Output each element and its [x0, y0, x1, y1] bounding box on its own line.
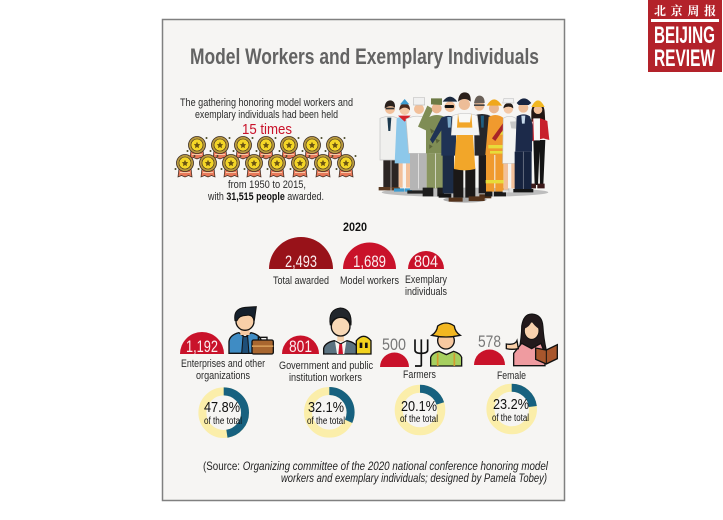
- logo: Beijing Review: 北京周报: [654, 2, 716, 19]
- stat: government and public institution workers: 801: [289, 337, 312, 356]
- stat: exemplary individuals: 804: [414, 252, 438, 271]
- donut chart: 20.1%: of the total: [400, 414, 438, 425]
- stat: government and public institution workers: Government and public: [279, 360, 373, 372]
- worker: soldier: [418, 98, 445, 196]
- text block: history intro: exemplary individuals had been held: [195, 109, 338, 121]
- illustration: group of workers: [379, 92, 549, 203]
- icon: businessman with briefcase: [229, 307, 273, 354]
- donut chart: 47.8%: 47.8%: [204, 399, 240, 416]
- stat: government and public institution workers: institution workers: [289, 372, 362, 384]
- worker: chef: [406, 98, 429, 194]
- text block: history intro: [180, 97, 353, 138]
- panel: main card: [162, 20, 564, 500]
- stat: enterprises and other organizations: organizations: [196, 370, 250, 382]
- stat: model workers: Model workers: [340, 275, 399, 287]
- stat: enterprises and other organizations: [180, 332, 265, 382]
- stat: total awarded: Total awarded: [273, 275, 329, 287]
- donut chart: 47.8%: of the total: [204, 416, 242, 427]
- donut chart: 32.1%: 32.1%: [308, 399, 344, 416]
- icon: government worker with building: [324, 308, 371, 354]
- donut chart: 32.1%: of the total: [307, 416, 345, 427]
- stat: farmers: [380, 335, 436, 381]
- donut chart: 47.8%: [202, 391, 245, 434]
- stat: total awarded: [269, 237, 333, 287]
- stat: enterprises and other organizations: Enterprises and other: [181, 358, 265, 370]
- donut chart: 23.2%: 23.2%: [493, 396, 529, 413]
- worker: doctor: [379, 100, 400, 190]
- donut chart: 32.1%: [307, 391, 351, 434]
- donut chart: 20.1%: 20.1%: [401, 398, 437, 415]
- source note: workers and exemplary individuals; designed by Pamela Tobey): [281, 471, 547, 485]
- worker: central cook: [449, 92, 485, 202]
- logo: Beijing Review: [648, 0, 722, 72]
- stat: government and public institution workers: [279, 336, 373, 384]
- worker: police officer: [513, 98, 536, 192]
- stat: exemplary individuals: Exemplary: [405, 274, 447, 286]
- stat: model workers: [340, 243, 399, 287]
- worker: pilot: [430, 97, 457, 198]
- stat: female: [474, 332, 526, 382]
- source note: [203, 459, 548, 485]
- icon: farmer with pitchfork: [415, 323, 462, 366]
- highlight: 15 times: 15 times: [242, 121, 292, 138]
- donut chart: 23.2%: [490, 388, 533, 430]
- stat: model workers: 1,689: [353, 252, 386, 271]
- stat: enterprises and other organizations: 1,192: [186, 337, 218, 356]
- stat: farmers: 500: [382, 335, 406, 354]
- donut chart: 20.1%: [399, 389, 441, 431]
- donut chart: 23.2%: of the total: [492, 413, 529, 424]
- stat: female: Female: [497, 370, 526, 382]
- icon row: 15 medals: [174, 136, 356, 177]
- stat: exemplary individuals: [405, 251, 447, 298]
- worker: nurse: [503, 98, 524, 192]
- source note: (Source: Organizing committee of the 2020 national conference honoring model: [203, 459, 548, 473]
- stat: farmers: Farmers: [403, 369, 436, 381]
- text block: years and people awarded: from 1950 to 2015,: [228, 179, 306, 191]
- icon: woman with book: [506, 314, 557, 366]
- text block: years and people awarded: [207, 179, 324, 203]
- text block: history intro: The gathering honoring model workers and: [180, 97, 353, 109]
- stat: female: 578: [478, 332, 501, 351]
- worker: businessman: [474, 96, 493, 198]
- worker: firefighter: [485, 99, 513, 196]
- heading: 2020: 2020: [343, 220, 367, 234]
- stat: total awarded: 2,493: [285, 252, 317, 271]
- text block: years and people awarded: with 31,515 people awarded.: [207, 191, 324, 203]
- stat: exemplary individuals: individuals: [405, 286, 447, 298]
- title: Model Workers and Exemplary Individuals: [190, 44, 539, 69]
- worker: flight attendant: [394, 99, 413, 192]
- worker: engineer: [531, 100, 549, 188]
